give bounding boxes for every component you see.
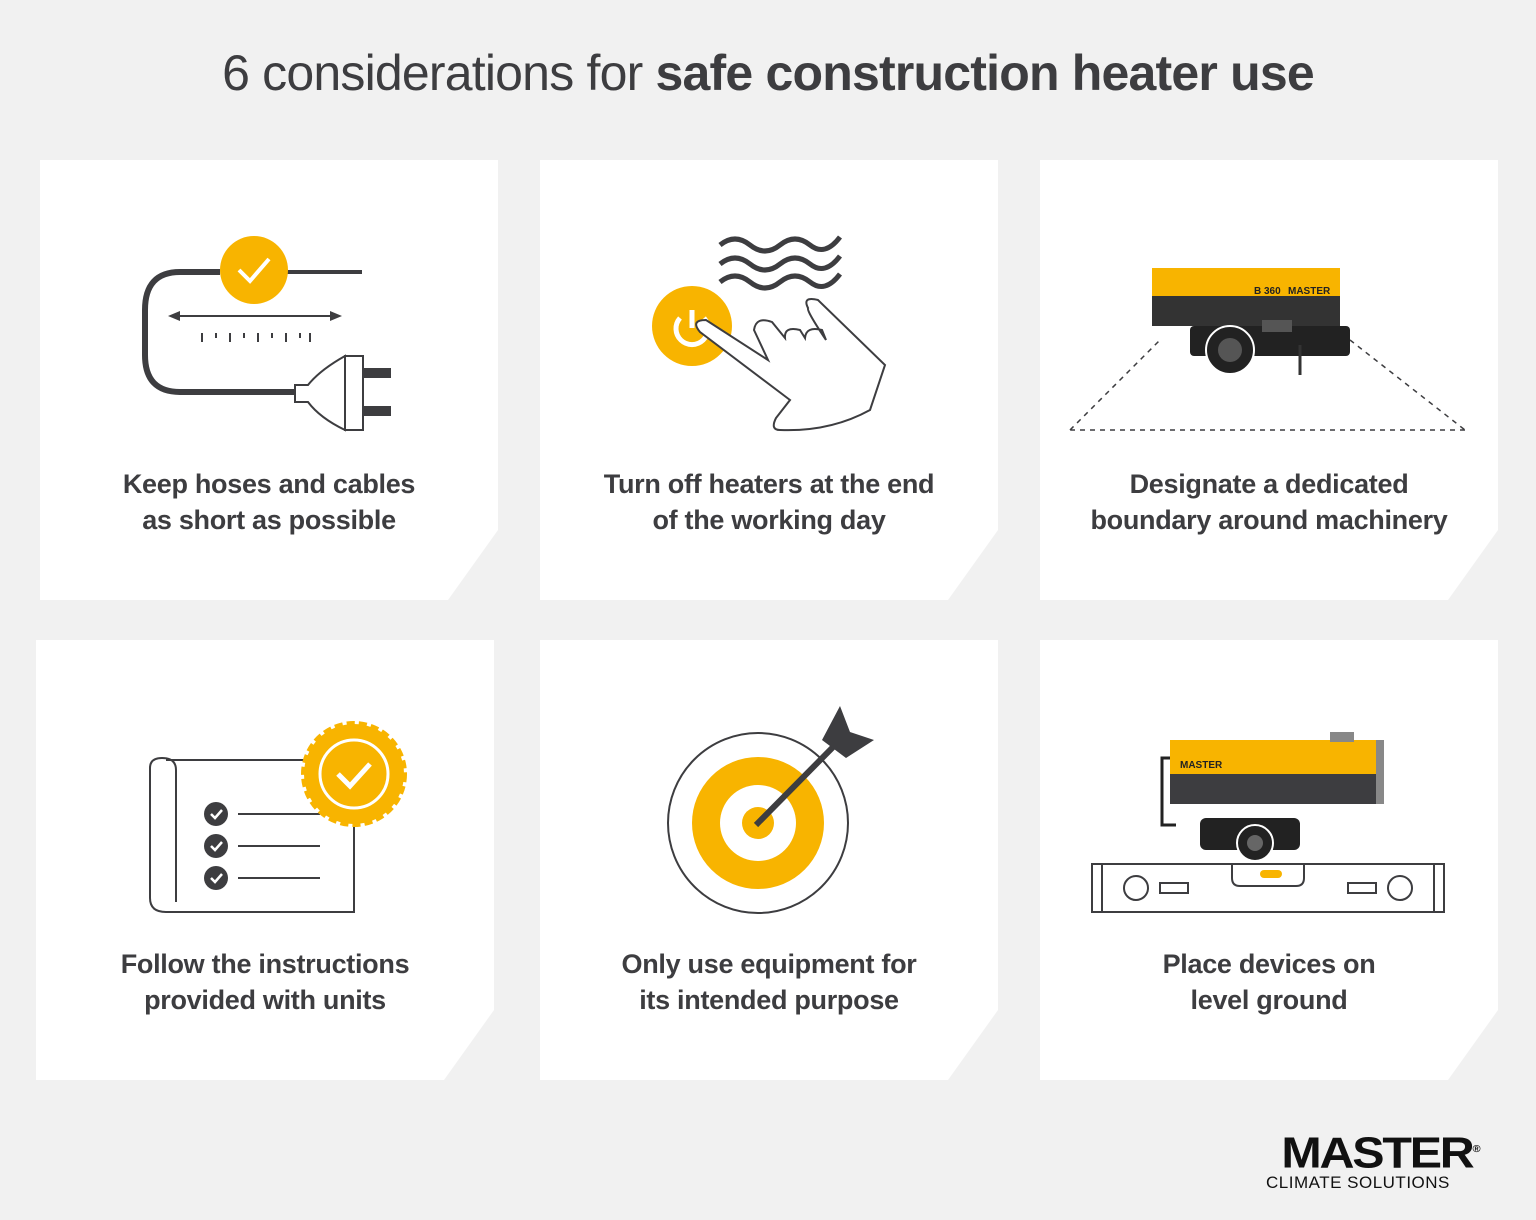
panel: intended purpose: Only use equipment for (622, 949, 916, 979)
icon: heater with dashed boundary: B 360 (1254, 286, 1281, 297)
panel: instructions: Follow the instructions (121, 949, 409, 979)
icon: heater on spirit level: MASTER (1180, 760, 1223, 771)
icon: checklist with badge (149, 721, 407, 913)
panel: intended purpose (540, 640, 998, 1080)
panel: boundary: Designate a dedicated (1130, 469, 1408, 499)
icon: hand pressing power button (652, 236, 886, 432)
panel: level ground: level ground (1191, 985, 1347, 1015)
panel: hoses and cables: as short as possible (142, 505, 396, 535)
panel: level ground (1040, 640, 1498, 1080)
icon: heater with dashed boundary: MASTER (1288, 286, 1331, 297)
icon: target with arrow (667, 706, 874, 914)
panel: hoses and cables: Keep hoses and cables (123, 469, 415, 499)
panel: level ground: Place devices on (1163, 949, 1375, 979)
logo: CLIMATE SOLUTIONS (1266, 1173, 1450, 1192)
panel: instructions (36, 640, 494, 1080)
title: 6 considerations for safe construction heater use (222, 45, 1314, 101)
panel: turn off heaters: of the working day (652, 505, 886, 535)
panel: boundary: boundary around machinery (1090, 505, 1448, 535)
icon: cable with plug (142, 236, 391, 432)
panel: hoses and cables (40, 160, 498, 600)
icon: heater on spirit level (1091, 732, 1445, 913)
panel: intended purpose: its intended purpose (639, 985, 899, 1015)
logo: MASTER® (1281, 1129, 1478, 1178)
icon: heater with dashed boundary (1070, 268, 1465, 431)
panel: instructions: provided with units (144, 985, 386, 1015)
panel: turn off heaters (540, 160, 998, 600)
panel: boundary (1040, 160, 1498, 600)
panel: turn off heaters: Turn off heaters at the end (604, 469, 934, 499)
